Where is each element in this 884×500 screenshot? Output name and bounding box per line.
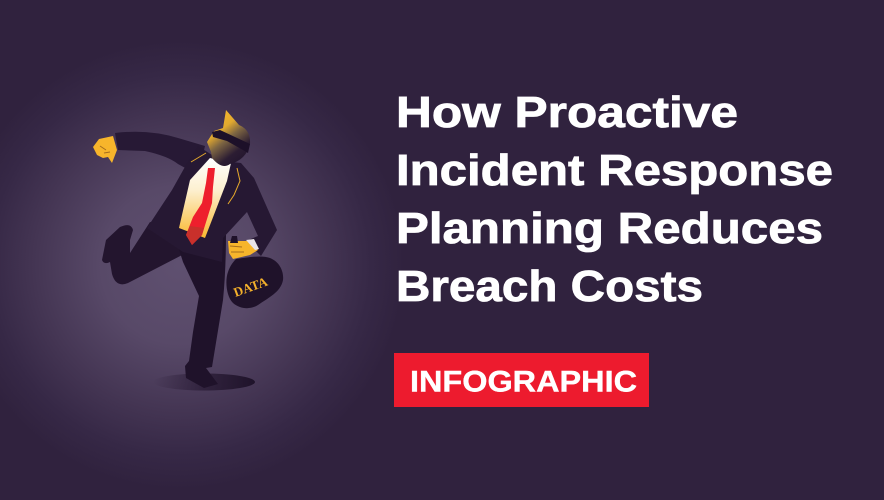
- watch cuff: [246, 239, 259, 250]
- left hand: [93, 136, 117, 163]
- infographic badge: INFOGRAPHIC: [410, 366, 637, 398]
- title: Breach Costs: [396, 262, 703, 311]
- right hand: [228, 236, 258, 259]
- title: [396, 88, 833, 311]
- title: Incident Response: [396, 146, 833, 195]
- shirt: [179, 158, 231, 238]
- arm raised behind: [115, 132, 205, 175]
- jacket: [147, 146, 277, 262]
- bag label: DATA: [231, 274, 270, 300]
- tie: [186, 168, 215, 245]
- infographic badge: [394, 353, 649, 407]
- front leg and shoe: [176, 232, 226, 388]
- jacket lapel trim: [191, 153, 240, 204]
- title: Planning Reduces: [396, 204, 823, 253]
- back leg and shoe: [102, 222, 192, 284]
- data bag: [226, 256, 283, 308]
- title: How Proactive: [396, 88, 738, 137]
- illustration: thief running with data bag: [93, 110, 283, 388]
- head: [207, 110, 250, 166]
- radial glow behind figure: [0, 30, 410, 500]
- blindfold: [212, 130, 250, 153]
- floor shadow: [153, 374, 255, 390]
